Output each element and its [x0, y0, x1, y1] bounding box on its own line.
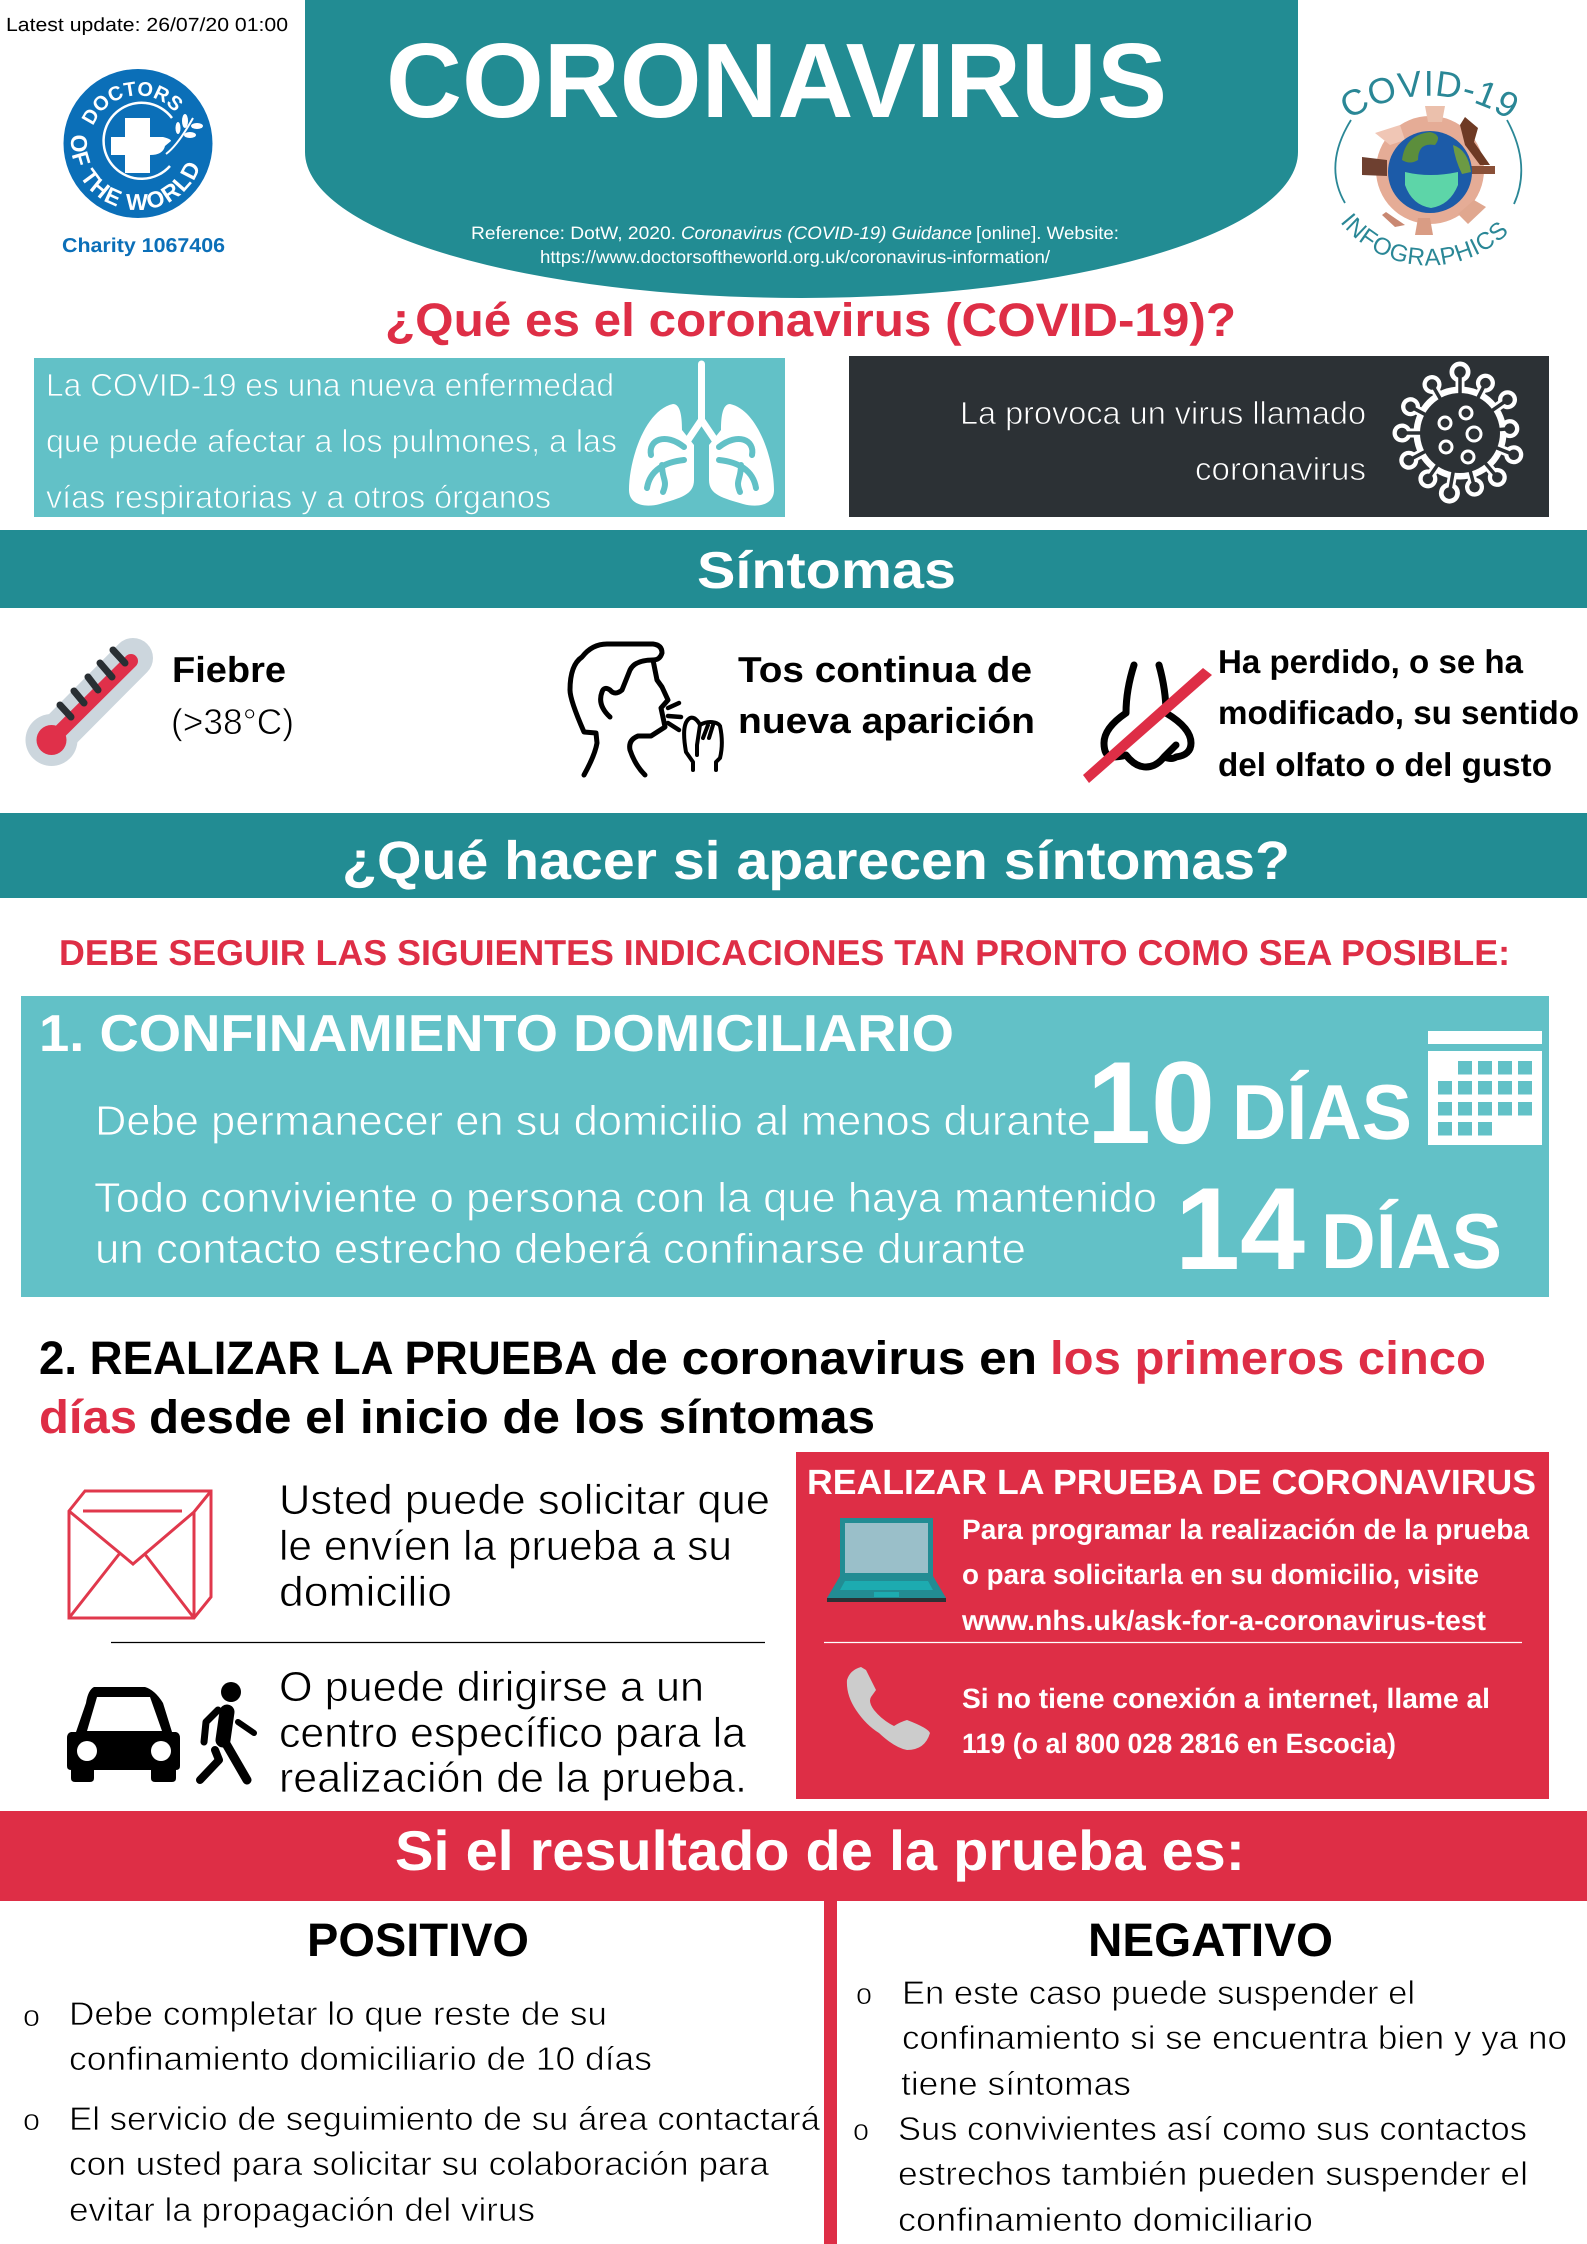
symptom: fever: [171, 649, 294, 742]
positive bullet 2: con usted para solicitar su colaboración para: [69, 2145, 770, 2182]
icon: car: [67, 1687, 180, 1782]
title: CORONAVIRUS: [386, 22, 1167, 140]
header banner: [305, 0, 1298, 298]
icon: walking person: [200, 1682, 254, 1780]
heading: what is coronavirus: ¿Qué es el coronavirus (COVID-19)?: [385, 293, 1236, 346]
icon: phone: [847, 1667, 930, 1750]
online booking text: [961, 1514, 1529, 1636]
14 days figure: 14: [1175, 1163, 1305, 1294]
icon: coughing person: [570, 644, 722, 775]
panel: what COVID-19 is: [34, 358, 785, 517]
negative bullet 1: [856, 1974, 1567, 2102]
text: home test request: Usted puede solicitar que: [279, 1476, 770, 1523]
positive bullet 1: [23, 1995, 652, 2077]
heading: take the test: [39, 1331, 1486, 1443]
text: home test request: le envíen la prueba a su: [279, 1522, 732, 1569]
symptom: continuous cough: [738, 649, 1035, 741]
panel: negative result: [853, 1913, 1567, 2238]
panel: positive result: [23, 1913, 821, 2228]
panel heading: REALIZAR LA PRUEBA DE CORONAVIRUS: [807, 1463, 1536, 1502]
cause text: La provoca un virus llamado: [960, 395, 1366, 431]
negative bullet 2: o: [853, 2114, 869, 2147]
reference citation: Reference: DotW, 2020.: [471, 223, 676, 243]
band: what to do heading: ¿Qué hacer si aparecen síntomas?: [342, 831, 1290, 891]
panel: book a test: [796, 1452, 1549, 1799]
10 days figure: 10: [1087, 1037, 1215, 1168]
negative bullet 1: confinamiento si se encuentra bien y ya no: [902, 2019, 1567, 2056]
cause text: [960, 395, 1366, 487]
household contacts text: Todo conviviente o persona con la que haya mantenido: [94, 1174, 1157, 1221]
heading: take the test: de coronavirus en: [610, 1331, 1037, 1384]
online booking text: www.nhs.uk/ask-for-a-coronavirus-test: [961, 1605, 1486, 1636]
panel: home confinement: [21, 996, 1549, 1297]
positive bullet 1: confinamiento domiciliario de 10 días: [69, 2040, 652, 2077]
negative bullet 1: tiene síntomas: [901, 2065, 1131, 2102]
10 days figure: DÍAS: [1232, 1068, 1412, 1156]
icon: calendar: [1428, 1031, 1542, 1145]
household contacts text: [94, 1174, 1157, 1272]
logo: COVID-19 Infographics: INFOGRAPHICS: [1341, 213, 1507, 266]
confinement heading: 1. CONFINAMIENTO DOMICILIARIO: [39, 1005, 954, 1063]
panel: caused by a virus: [849, 356, 1549, 517]
band: symptoms heading: [0, 530, 1587, 608]
14 days figure: DÍAS: [1321, 1197, 1502, 1285]
phone booking text: [962, 1683, 1490, 1759]
reference citation: [471, 223, 1119, 267]
positive bullet 2: o: [23, 2104, 40, 2137]
positive bullet 2: El servicio de seguimiento de su área contactará: [69, 2100, 821, 2137]
symptom: continuous cough: nueva aparición: [738, 700, 1035, 741]
positive bullet 1: o: [23, 2000, 40, 2033]
heading: take the test: los primeros cinco: [1050, 1331, 1486, 1384]
logo: COVID-19 Infographics: [1334, 70, 1522, 266]
icon: thermometer: [26, 650, 133, 766]
description text: vías respiratorias y a otros órganos: [46, 479, 551, 515]
band: what to do heading: [0, 813, 1587, 898]
red instruction line: DEBE SEGUIR LAS SIGUIENTES INDICACIONES TAN PRONTO COMO SEA POSIBLE:: [59, 932, 1510, 973]
14 days figure: [1175, 1163, 1502, 1294]
symptom: fever: (>38°C): [171, 701, 294, 742]
description text: La COVID-19 es una nueva enfermedad: [46, 367, 614, 403]
symptom: loss of smell or taste: del olfato o del gusto: [1218, 746, 1552, 783]
logo: Doctors of the World: [64, 69, 212, 218]
band: symptoms heading: Síntomas: [697, 542, 956, 600]
logo: Doctors of the World: DOCTORS: [82, 82, 182, 125]
symptom: loss of smell or taste: modificado, su sentido: [1218, 694, 1579, 731]
text: test centre: [279, 1663, 747, 1801]
10 days figure: [1087, 1037, 1412, 1168]
heading: take the test: días: [39, 1390, 137, 1443]
reference citation: [online]. Website:: [976, 223, 1119, 243]
icon: envelope: [69, 1491, 211, 1618]
logo: COVID-19 Infographics: COVID-19: [1342, 70, 1518, 116]
negative bullet 1: En este caso puede suspender el: [902, 1974, 1415, 2011]
positive heading: POSITIVO: [307, 1913, 529, 1966]
reference citation: Coronavirus (COVID-19) Guidance: [681, 223, 972, 243]
band: test result heading: [0, 1811, 1587, 1901]
icon: laptop: [827, 1518, 946, 1602]
negative bullet 1: o: [856, 1978, 872, 2011]
online booking text: Para programar la realización de la prueba: [962, 1514, 1529, 1545]
text: home test request: domicilio: [279, 1568, 452, 1615]
online booking text: o para solicitarla en su domicilio, visite: [962, 1559, 1479, 1590]
cause text: coronavirus: [1195, 451, 1366, 487]
charity number: Charity 1067406: [62, 235, 225, 257]
phone booking text: 119 (o al 800 028 2816 en Escocia): [962, 1728, 1396, 1759]
symptom: loss of smell or taste: [1218, 643, 1579, 783]
negative heading: NEGATIVO: [1088, 1913, 1333, 1966]
band: test result heading: Si el resultado de la prueba es:: [395, 1819, 1245, 1882]
household contacts text: un contacto estrecho deberá confinarse durante: [95, 1225, 1026, 1272]
text: test centre: O puede dirigirse a un: [279, 1663, 704, 1710]
negative bullet 2: Sus convivientes así como sus contactos: [898, 2110, 1527, 2147]
latest update stamp: Latest update: 26/07/20 01:00: [6, 15, 288, 36]
icon: lungs: [629, 364, 774, 506]
positive bullet 1: Debe completar lo que reste de su: [69, 1995, 607, 2032]
description text: que puede afectar a los pulmones, a las: [46, 423, 617, 459]
heading: take the test: desde el inicio de los síntomas: [149, 1390, 875, 1443]
negative bullet 2: [853, 2110, 1528, 2238]
text: test centre: centro específico para la: [279, 1709, 747, 1756]
description text: [46, 367, 617, 515]
icon: crossed-out nose: [1083, 665, 1212, 783]
positive bullet 2: evitar la propagación del virus: [69, 2191, 535, 2228]
reference citation: https://www.doctorsoftheworld.org.uk/coronavirus-information/: [540, 247, 1050, 267]
logo: Doctors of the World: OF THE WORLD: [70, 136, 198, 210]
icon: virus: [1397, 366, 1520, 500]
positive bullet 2: [23, 2100, 821, 2228]
negative bullet 2: confinamiento domiciliario: [898, 2201, 1313, 2238]
symptom: fever: Fiebre: [172, 649, 286, 690]
text: home test request: [279, 1476, 770, 1615]
negative bullet 2: estrechos también pueden suspender el: [898, 2155, 1528, 2192]
heading: take the test: 2. REALIZAR LA PRUEBA: [39, 1331, 597, 1384]
stay at home text: Debe permanecer en su domicilio al menos durante: [95, 1097, 1091, 1144]
phone booking text: Si no tiene conexión a internet, llame al: [962, 1683, 1490, 1714]
text: test centre: realización de la prueba.: [279, 1754, 747, 1801]
symptom: continuous cough: Tos continua de: [738, 649, 1032, 690]
symptom: loss of smell or taste: Ha perdido, o se ha: [1218, 643, 1524, 680]
